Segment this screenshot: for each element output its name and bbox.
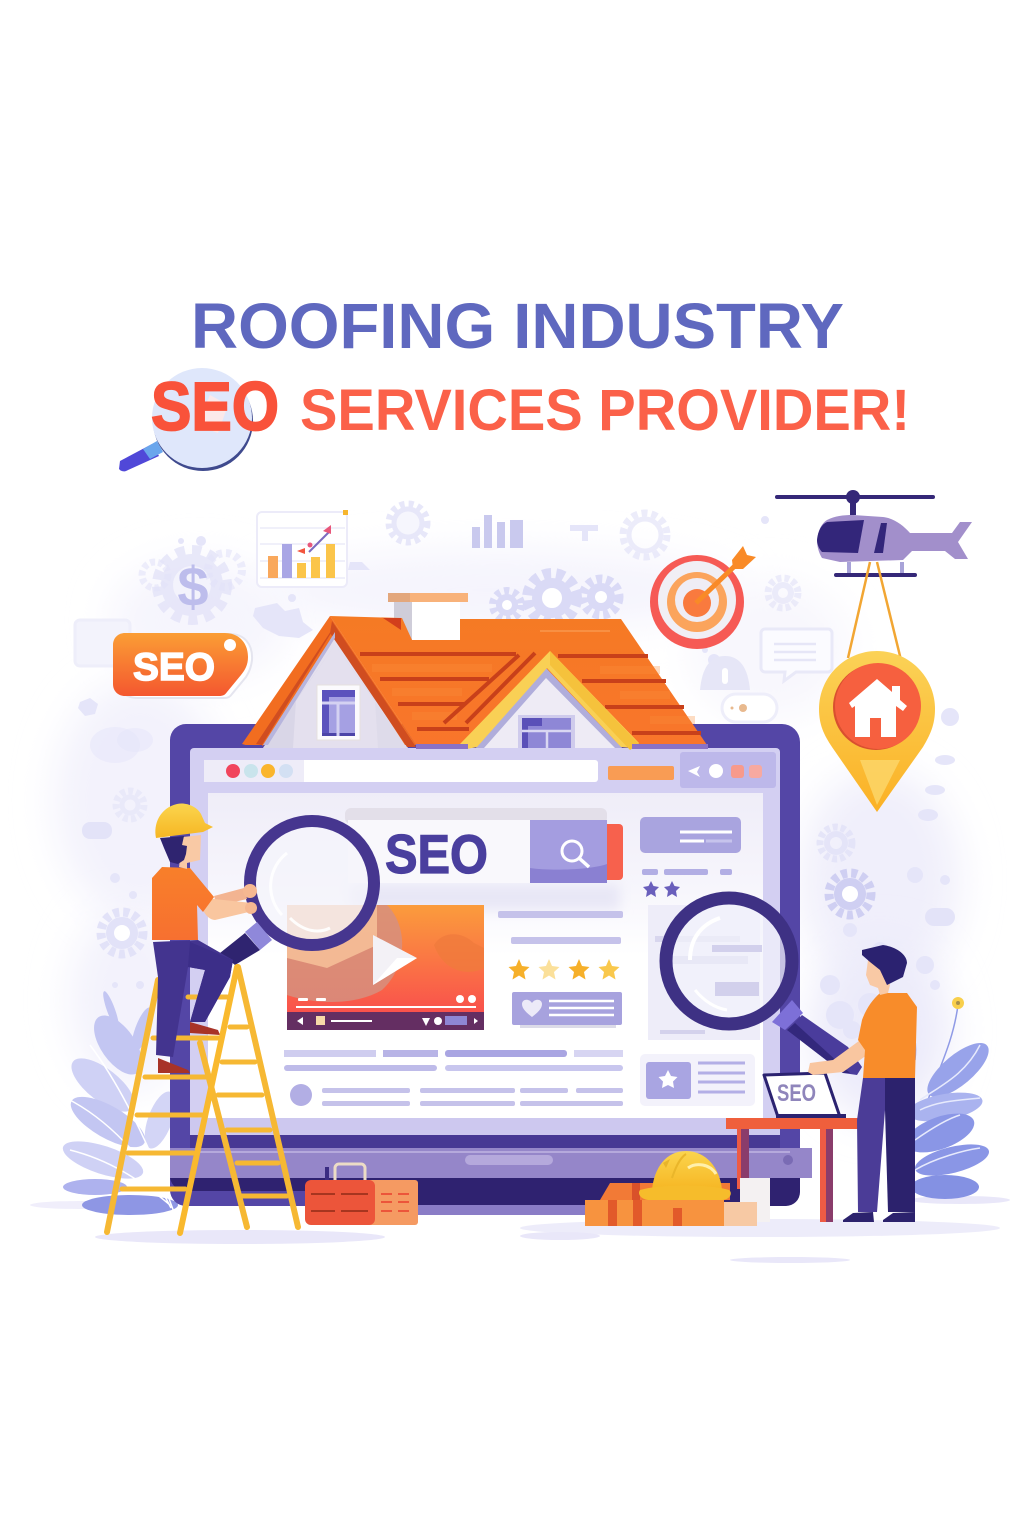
lower box	[585, 1183, 724, 1226]
rating mini row	[642, 869, 732, 897]
man hair	[862, 945, 907, 985]
man shoes	[843, 1212, 915, 1222]
magnifier left	[250, 821, 374, 945]
browser screen	[190, 748, 780, 1135]
man neck and face	[866, 960, 890, 995]
small gable wall	[476, 672, 622, 748]
right mini card	[640, 817, 741, 853]
left gable wall	[263, 638, 408, 748]
chart card	[257, 510, 348, 587]
title: ROOFING INDUSTRY	[191, 290, 844, 362]
pin red circle	[833, 663, 921, 750]
worker shirt	[152, 867, 214, 940]
seo tag: SEO	[133, 646, 215, 689]
roof eaves	[242, 744, 708, 749]
heart card	[512, 992, 622, 1028]
icon: chat bubble	[761, 629, 832, 681]
handle	[787, 1015, 862, 1075]
man shirt	[858, 993, 917, 1078]
roof shingle lines	[372, 668, 695, 720]
worker head	[179, 835, 201, 869]
house	[242, 593, 708, 750]
ring	[666, 898, 792, 1024]
right document panel	[648, 905, 760, 1040]
table with laptop	[726, 1073, 858, 1222]
right plant	[901, 997, 997, 1199]
address bar	[204, 760, 598, 782]
lens	[666, 898, 792, 1024]
magnifier right	[666, 898, 862, 1075]
toolbar group	[680, 752, 776, 788]
icon: dollar gear label: $	[177, 555, 209, 618]
icon: bell	[700, 656, 750, 690]
browser content	[284, 808, 760, 1106]
video player	[287, 905, 484, 1030]
helicopter	[775, 490, 972, 577]
title: SERVICES PROVIDER!	[300, 378, 910, 443]
icon: notification pill	[722, 694, 777, 722]
magnifier collar	[245, 922, 272, 950]
worker pants	[153, 940, 233, 1057]
worker helmet	[155, 804, 213, 838]
monitor body	[170, 724, 800, 1206]
worker arm	[214, 888, 247, 906]
pin body	[819, 651, 935, 812]
small box	[724, 1202, 757, 1226]
main roof	[330, 616, 707, 745]
seo tag	[113, 633, 252, 698]
toolbox	[305, 1164, 418, 1225]
monitor base band	[190, 1135, 780, 1149]
laptop	[764, 1073, 846, 1118]
upper box	[600, 1183, 730, 1200]
icon: house	[849, 679, 907, 737]
background wash	[55, 550, 960, 1120]
table legs	[737, 1129, 833, 1222]
man arm	[808, 1038, 867, 1075]
man with laptop	[808, 945, 917, 1222]
search bar: SEO	[385, 823, 488, 885]
laptop: SEO	[777, 1080, 816, 1107]
left fascia	[242, 616, 416, 748]
icon: faint video box	[75, 620, 130, 666]
collar	[772, 1000, 803, 1030]
monitor	[170, 724, 812, 1215]
table top	[726, 1118, 858, 1129]
right column lines	[498, 911, 623, 944]
hanging location pin	[819, 562, 935, 812]
avatar dot	[290, 1084, 312, 1106]
small gable window	[518, 715, 575, 748]
title	[151, 290, 910, 445]
search bar	[345, 808, 623, 910]
title magnifier icon	[119, 368, 253, 471]
ropes	[848, 562, 901, 660]
title: SEO	[151, 368, 279, 445]
chimney	[388, 593, 468, 640]
ladder back	[107, 967, 298, 1232]
white box	[740, 1178, 770, 1222]
target icon	[650, 546, 756, 649]
left plant	[59, 990, 182, 1215]
magnifier handle	[220, 933, 260, 965]
rating stars	[508, 959, 620, 980]
text lines under video	[284, 1050, 623, 1106]
window dots	[226, 764, 293, 778]
worker on ladder	[152, 804, 272, 1233]
small gable yellow trim	[460, 651, 639, 749]
icon: faint bar chart	[472, 515, 523, 548]
stacked boxes and hard hat	[585, 1151, 770, 1226]
hard hat	[639, 1151, 731, 1200]
background gears and blobs	[101, 504, 871, 954]
ladder front rail	[180, 967, 237, 1233]
orange button	[608, 766, 674, 780]
ground shadow	[30, 1196, 1010, 1263]
star card	[640, 1054, 755, 1106]
worker shoes	[158, 1022, 220, 1073]
bubble: chat left	[82, 822, 955, 926]
man pants	[857, 1078, 890, 1212]
left window	[317, 685, 360, 740]
